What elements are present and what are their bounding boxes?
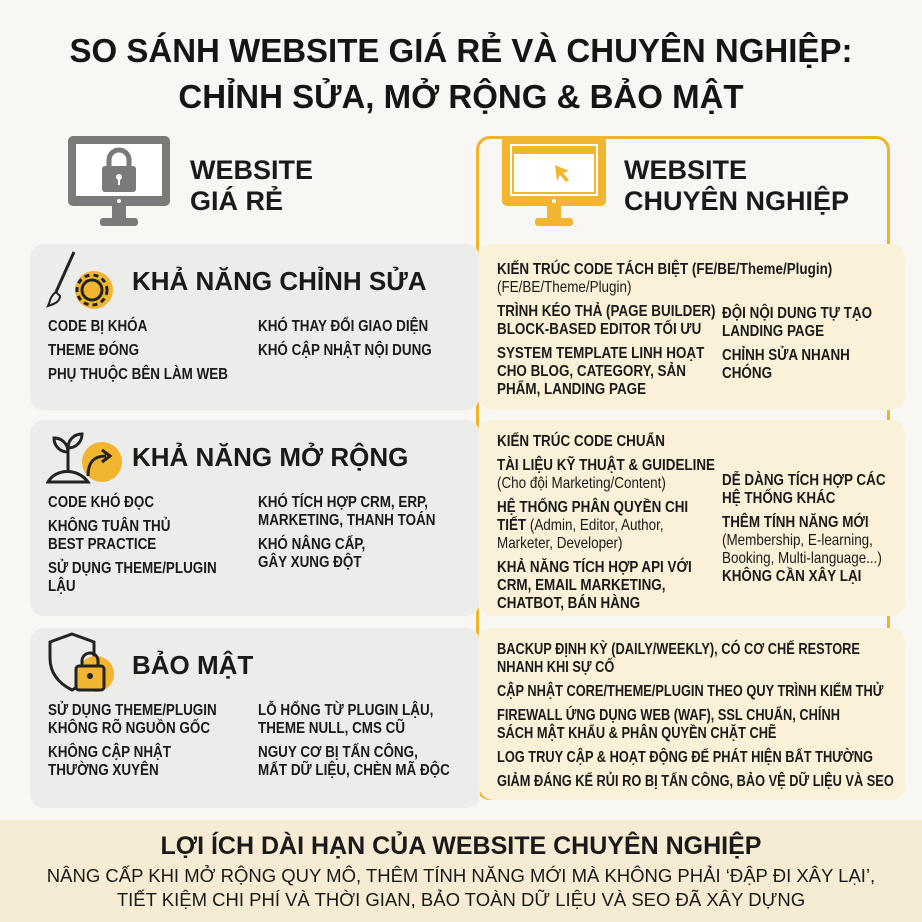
heading: KHẢ NĂNG MỞ RỘNG: [132, 442, 408, 472]
icon: plant arrow: [46, 432, 122, 484]
list right: KHÓ TÍCH HỢP CRM, ERP,: [258, 494, 428, 511]
list left: [48, 316, 228, 383]
panel: scaling (pro): CHATBOT, BÁN HÀNG: [497, 595, 640, 612]
list left: LẬU: [48, 578, 76, 595]
footer text: [47, 865, 875, 910]
panel: security (cheap): [30, 628, 480, 808]
panel: scaling (pro): THÊM TÍNH NĂNG MỚI: [722, 514, 869, 531]
list left: THEME ĐÓNG: [48, 342, 139, 359]
panel: scaling (pro): [479, 420, 905, 616]
list left: SỬ DỤNG THEME/PLUGIN: [48, 560, 217, 577]
list right: MẤT DỮ LIỆU, CHÈN MÃ ĐỘC: [258, 762, 450, 779]
panel: editing (pro): (FE/BE/Theme/Plugin): [497, 279, 631, 296]
heading: pro website: CHUYÊN NGHIỆP: [624, 186, 849, 216]
list left: KHÔNG CẬP NHẬT: [48, 744, 171, 761]
list left: PHỤ THUỘC BÊN LÀM WEB: [48, 366, 228, 383]
heading: pro website: WEBSITE: [624, 155, 747, 185]
icon: gray monitor with lock: [68, 136, 170, 226]
heading: BẢO MẬT: [132, 650, 253, 680]
panel: editing (pro): CHỈNH SỬA NHANH CHÓNG: [722, 347, 850, 382]
list right: KHÓ CẬP NHẬT NỘI DUNG: [258, 342, 432, 359]
panel: security (pro): LOG TRUY CẬP & HOẠT ĐỘNG ĐỂ PHÁT HIỆN BẤT THƯỜNG: [497, 749, 873, 766]
panel: scaling (cheap): [30, 420, 480, 616]
footer heading: LỢI ÍCH DÀI HẠN CỦA WEBSITE CHUYÊN NGHIỆP: [160, 832, 761, 860]
panel: scaling (pro): TÀI LIỆU KỸ THUẬT & GUIDELINE: [497, 457, 715, 474]
panel: security (pro): CẬP NHẬT CORE/THEME/PLUGIN THEO QUY TRÌNH KIỂM THỬ: [497, 683, 883, 700]
list left: KHÔNG RÕ NGUỒN GỐC: [48, 720, 210, 737]
title: CHỈNH SỬA, MỞ RỘNG & BẢO MẬT: [178, 78, 744, 115]
panel: security (pro): GIẢM ĐÁNG KỂ RỦI RO BỊ TẤN CÔNG, BẢO VỆ DỮ LIỆU VÀ SEO: [497, 773, 894, 790]
list left: SỬ DỤNG THEME/PLUGIN: [48, 702, 217, 719]
panel: security (pro): [479, 628, 905, 800]
icon: orange monitor with cursor: [502, 139, 606, 226]
panel: editing (pro): [479, 244, 905, 410]
heading: cheap website: WEBSITE: [190, 155, 313, 185]
panel: editing (pro): ĐỘI NỘI DUNG TỰ TẠO LANDING PAGE: [722, 305, 872, 340]
panel: editing (pro): TRÌNH KÉO THẢ (PAGE BUILDER) BLOCK-BASED EDITOR TỐI ƯU: [497, 303, 716, 338]
panel: scaling (pro): CRM, EMAIL MARKETING,: [497, 577, 665, 594]
heading: cheap website: [190, 155, 313, 216]
list left: CODE KHÓ ĐỌC: [48, 494, 154, 511]
heading: pro website: [624, 155, 849, 216]
icon: brush gear: [46, 251, 113, 309]
panel: scaling (pro): Marketer, Developer): [497, 535, 622, 552]
list right: [258, 700, 450, 779]
panel: editing (pro): KIẾN TRÚC CODE TÁCH BIỆT (FE/BE/Theme/Plugin): [497, 261, 832, 278]
list right: [258, 316, 432, 359]
list right: [258, 492, 435, 571]
panel: scaling (pro): (Cho đội Marketing/Content): [497, 475, 666, 492]
footer band: [0, 820, 922, 922]
list left: [48, 700, 217, 779]
title: SO SÁNH WEBSITE GIÁ RẺ VÀ CHUYÊN NGHIỆP:: [70, 32, 852, 69]
list right: MARKETING, THANH TOÁN: [258, 512, 435, 529]
list right: KHÓ THAY ĐỔI GIAO DIỆN: [258, 318, 428, 335]
list left: CODE BỊ KHÓA: [48, 318, 147, 335]
panel: security (pro): BACKUP ĐỊNH KỲ (DAILY/WEEKLY), CÓ CƠ CHẾ RESTORE: [497, 641, 860, 658]
panel: scaling (pro): KIẾN TRÚC CODE CHUẨN: [497, 433, 665, 450]
list right: GÂY XUNG ĐỘT: [258, 554, 362, 571]
panel: scaling (pro): (Membership, E-learning, Booking, Multi-language...): [722, 532, 882, 567]
panel: scaling (pro): KHÔNG CẦN XÂY LẠI: [722, 568, 861, 585]
list left: [48, 492, 217, 595]
heading: KHẢ NĂNG CHỈNH SỬA: [132, 266, 427, 296]
panel: scaling (pro): DỄ DÀNG TÍCH HỢP CÁC HỆ THỐNG KHÁC: [722, 472, 886, 507]
footer text: TIẾT KIỆM CHI PHÍ VÀ THỜI GIAN, BẢO TOÀN DỮ LIỆU VÀ SEO ĐÃ XÂY DỰNG: [117, 889, 805, 910]
panel: scaling (pro): KHẢ NĂNG TÍCH HỢP API VỚI: [497, 559, 692, 576]
panel: security (pro): NHANH KHI SỰ CỐ: [497, 659, 614, 676]
panel: scaling (pro): HỆ THỐNG PHÂN QUYỀN CHI: [497, 499, 688, 516]
list left: BEST PRACTICE: [48, 536, 156, 553]
panel: security (pro): SÁCH MẬT KHẨU & PHÂN QUYỀN CHẶT CHẼ: [497, 725, 776, 742]
list right: KHÓ NÂNG CẤP,: [258, 536, 365, 553]
title: [70, 32, 852, 115]
panel: security (pro): FIREWALL ỨNG DỤNG WEB (WAF), SSL CHUẨN, CHÍNH: [497, 707, 840, 724]
panel: scaling (pro): TIẾT (Admin, Editor, Author,: [497, 517, 664, 534]
list right: NGUY CƠ BỊ TẤN CÔNG,: [258, 744, 418, 761]
list right: THEME NULL, CMS CŨ: [258, 720, 405, 737]
icon: shield lock: [48, 632, 114, 692]
heading: cheap website: GIÁ RẺ: [190, 186, 283, 216]
list left: KHÔNG TUÂN THỦ: [48, 518, 170, 535]
panel: editing (pro): SYSTEM TEMPLATE LINH HOẠT CHO BLOG, CATEGORY, SẢN PHẨM, LANDING PAGE: [497, 345, 704, 398]
footer text: NÂNG CẤP KHI MỞ RỘNG QUY MÔ, THÊM TÍNH NĂNG MỚI MÀ KHÔNG PHẢI ‘ĐẬP ĐI XÂY LẠI’,: [47, 865, 875, 886]
list left: THƯỜNG XUYÊN: [48, 762, 159, 779]
panel: pro website border: [476, 136, 890, 800]
panel: editing (cheap): [30, 244, 480, 410]
list right: LỖ HỔNG TỪ PLUGIN LẬU,: [258, 702, 433, 719]
